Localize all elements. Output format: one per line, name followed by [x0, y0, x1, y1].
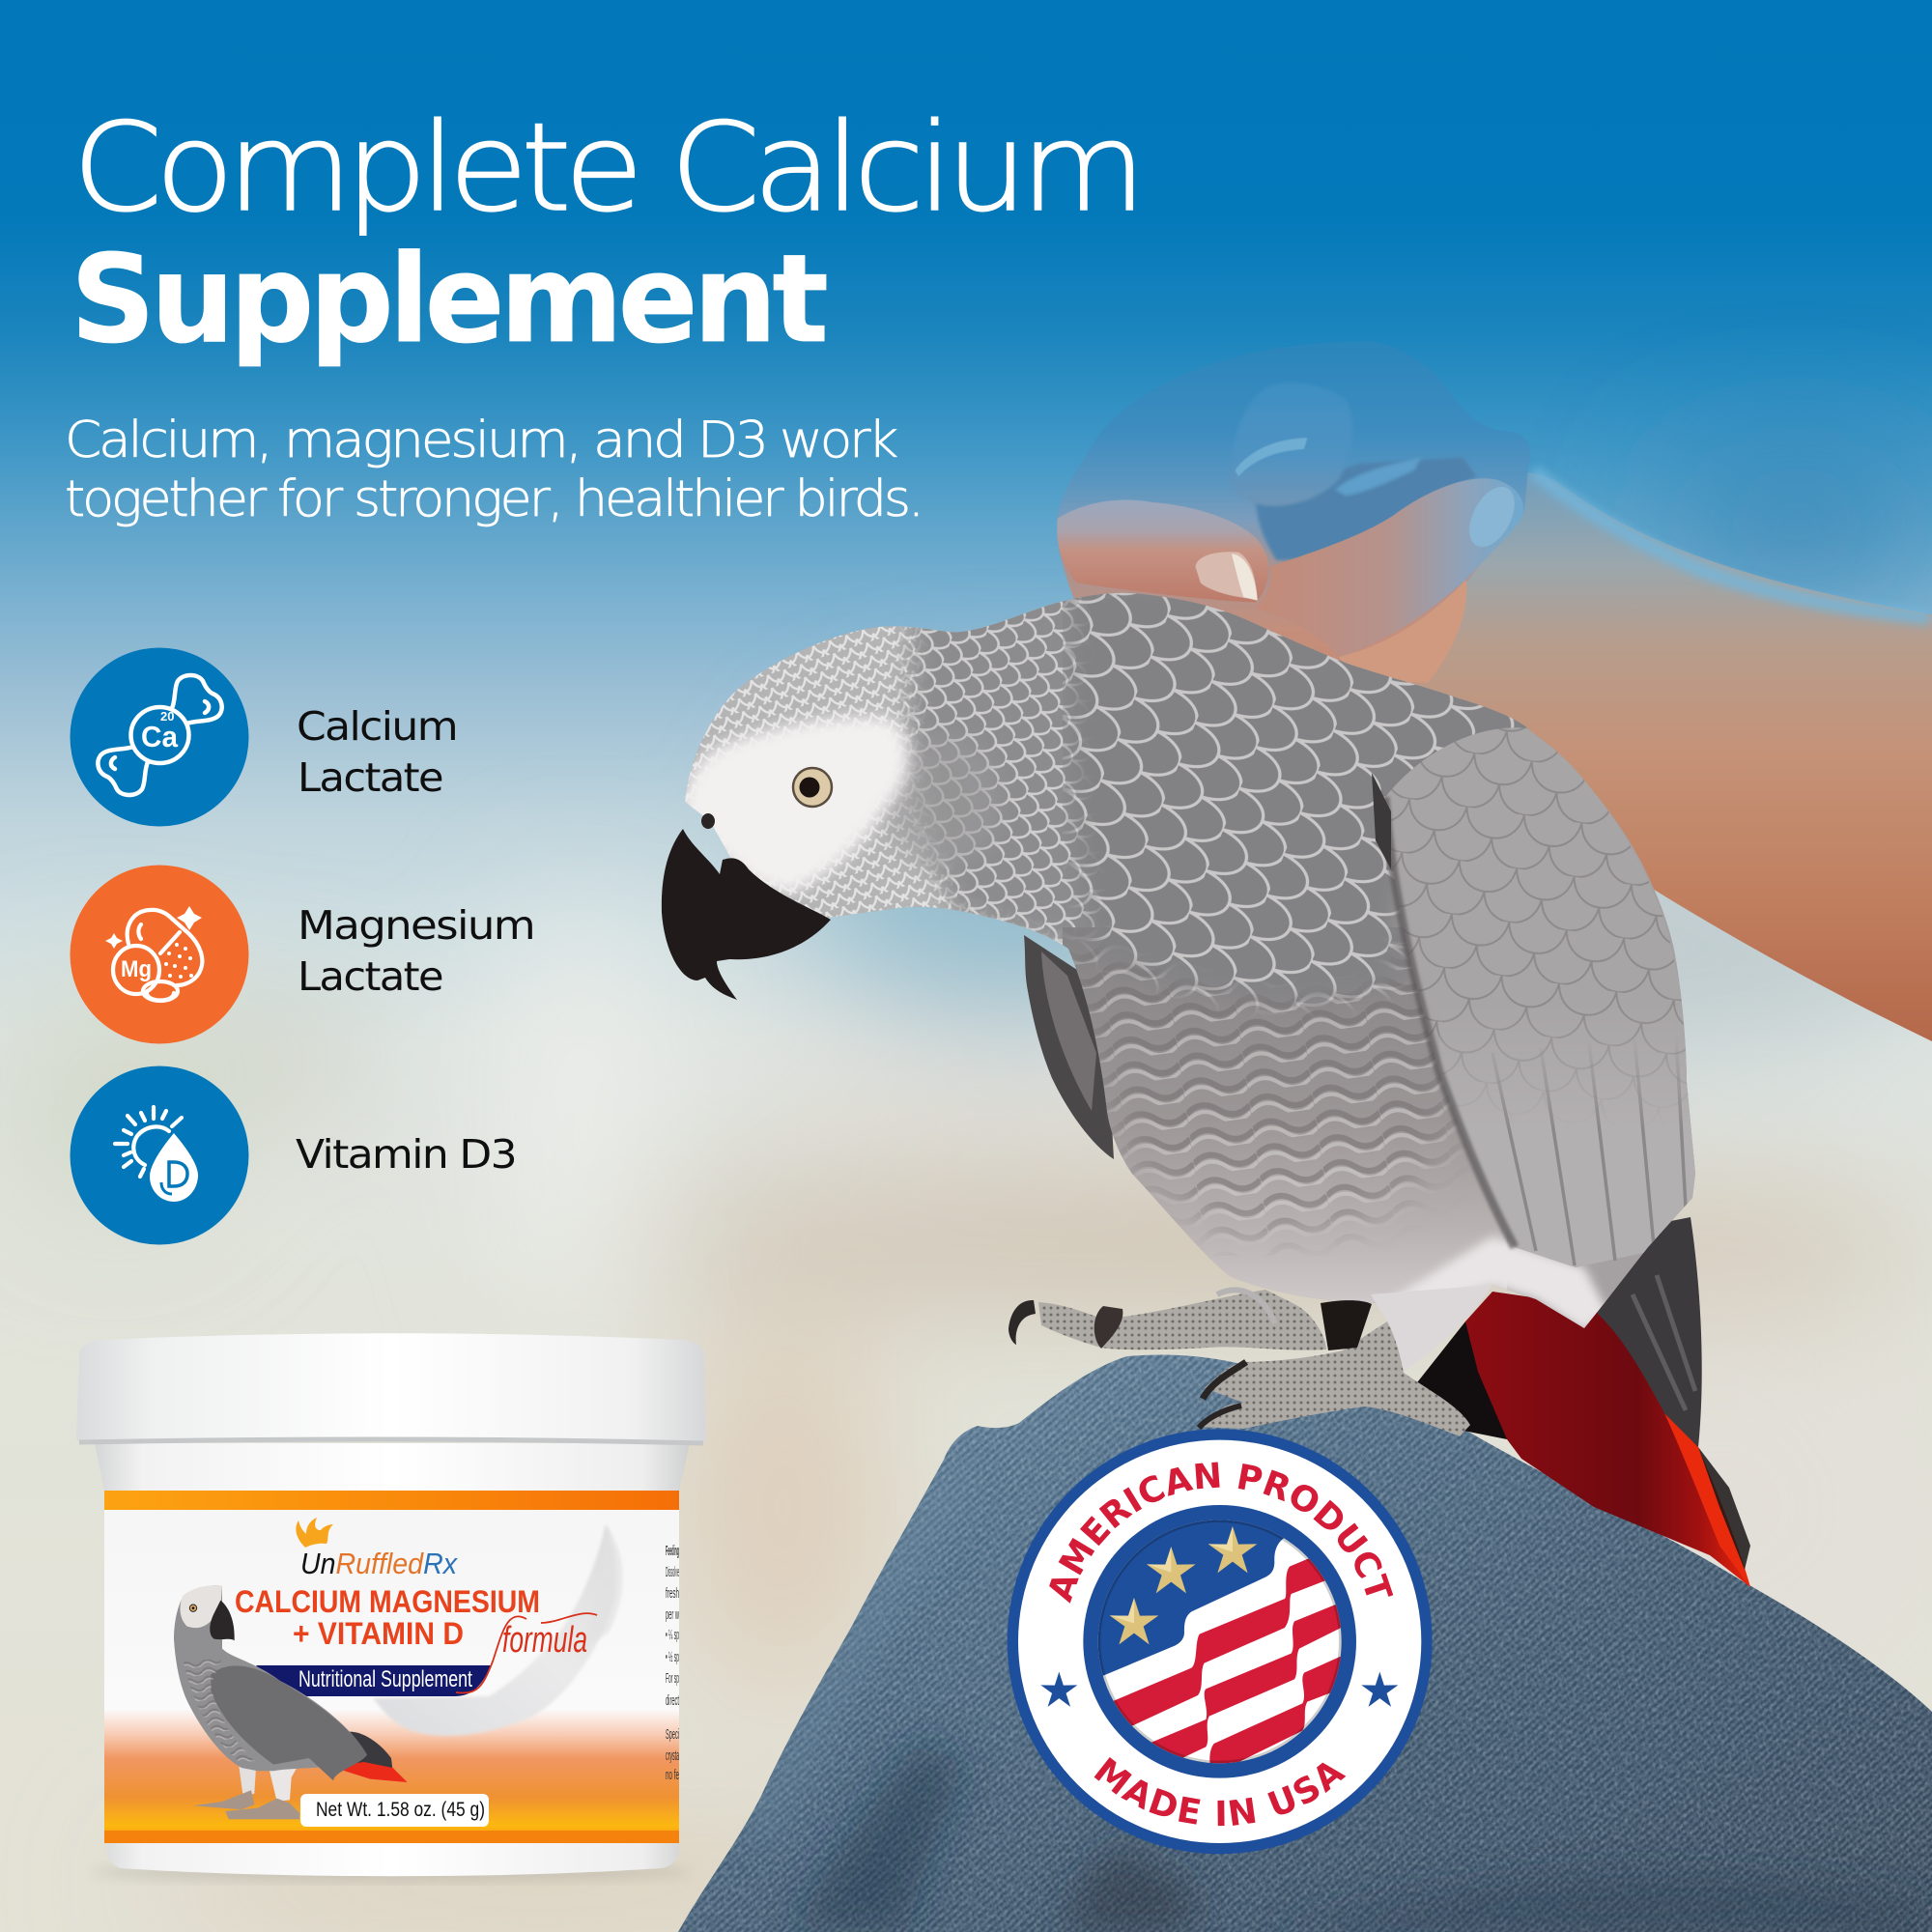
index finger — [1256, 478, 1523, 657]
label — [298, 902, 534, 1000]
ingredient: vitamin d3 — [70, 1066, 516, 1244]
subtitle: Calcium, magnesium, and D3 work — [65, 412, 897, 469]
belly — [1063, 927, 1507, 1303]
formula script: formula — [502, 1620, 587, 1661]
brand logo — [296, 1518, 458, 1580]
product jar: • ½ sp — [666, 1649, 679, 1665]
label: Lactate — [298, 754, 442, 801]
product jar: For sp — [666, 1670, 679, 1687]
curved text — [1036, 1456, 1404, 1834]
side directions text — [666, 1543, 679, 1783]
head small scales — [685, 601, 1063, 945]
nostril — [701, 813, 715, 829]
blue side stars — [1040, 1672, 1398, 1707]
product jar: crysta — [666, 1747, 679, 1764]
flag — [1094, 1516, 1352, 1775]
title — [71, 97, 1139, 370]
label: Magnesium — [298, 902, 534, 949]
ingredient: calcium lactate — [70, 647, 457, 827]
neck big scales — [1063, 580, 1565, 1024]
badge: American product made in USA — [1007, 1429, 1432, 1855]
dark side wing — [1024, 935, 1114, 1159]
hand — [1057, 341, 1531, 702]
undertail white — [1391, 1236, 1608, 1331]
ingredient: magnesium lactate — [70, 866, 534, 1043]
beak — [662, 829, 831, 1000]
product name — [235, 1584, 540, 1651]
nutritional supplement banner — [256, 1665, 492, 1696]
product jar: Dissolve — [666, 1564, 679, 1580]
label — [104, 1491, 679, 1843]
label — [297, 703, 457, 801]
neck medium scales — [895, 593, 1125, 945]
product jar: no fe — [666, 1767, 679, 1783]
product jar: Feeding — [666, 1543, 679, 1559]
curved text: AMERICAN PRODUCT — [1049, 1463, 1393, 1604]
upper foot — [1038, 1290, 1326, 1350]
product jar: Speci — [666, 1726, 679, 1743]
grey cheek — [884, 734, 1000, 869]
red tail — [1465, 1292, 1750, 1587]
product jar: fresh — [666, 1585, 679, 1602]
net weight tag — [300, 1794, 489, 1827]
icon: calcium bone: 20 — [160, 709, 174, 724]
jeans — [678, 1352, 1932, 1932]
dark rump shadow — [1410, 1321, 1507, 1439]
subtitle — [65, 412, 922, 528]
icon: calcium bone — [70, 647, 249, 827]
gold stars — [1110, 1526, 1257, 1644]
icon: magnesium capsule: Mg — [121, 956, 152, 982]
product jar: direct — [666, 1692, 679, 1709]
nutritional supplement banner: Nutritional Supplement — [298, 1666, 472, 1692]
jar lid — [76, 1333, 706, 1444]
product jar: • ¼ sp — [666, 1627, 679, 1643]
white face — [680, 717, 909, 894]
brand logo: UnRuffledRx — [300, 1547, 458, 1580]
product jar: per w — [666, 1606, 679, 1623]
label: Lactate — [298, 953, 442, 1000]
body silhouette with feathers — [676, 580, 1739, 1352]
curved text: MADE IN USA — [1094, 1757, 1347, 1826]
jar parrot illustration — [174, 1585, 408, 1819]
subtitle: together for stronger, healthier birds. — [65, 470, 922, 528]
arm — [1391, 471, 1932, 1041]
long wing feathers — [1439, 1005, 1700, 1267]
eye — [793, 768, 832, 807]
wing — [1385, 727, 1700, 1267]
thumb — [1057, 499, 1268, 602]
wrist — [1339, 580, 1466, 683]
product name: + VITAMIN D — [293, 1616, 464, 1651]
lower leg and foot — [1371, 1285, 1492, 1372]
product name: CALCIUM MAGNESIUM — [235, 1584, 540, 1619]
label: Calcium — [297, 703, 457, 750]
title: Complete Calcium — [72, 97, 1139, 239]
feather — [373, 1524, 623, 1736]
icon: magnesium capsule — [70, 866, 249, 1043]
jar body — [95, 1443, 690, 1876]
curled finger — [1230, 383, 1353, 506]
parrot — [662, 580, 1750, 1587]
label: Vitamin D3 — [296, 1131, 516, 1178]
icon: calcium bone: Ca — [141, 720, 179, 753]
formula script — [456, 1613, 597, 1693]
palm shadow behind fingers — [1256, 457, 1476, 560]
net weight tag: Net Wt. 1.58 oz. (45 g) — [316, 1799, 485, 1821]
icon: sun and D drop — [70, 1066, 249, 1244]
product jar — [76, 1333, 706, 1882]
title: Supplement — [71, 228, 827, 370]
grey tail — [1593, 1217, 1702, 1447]
